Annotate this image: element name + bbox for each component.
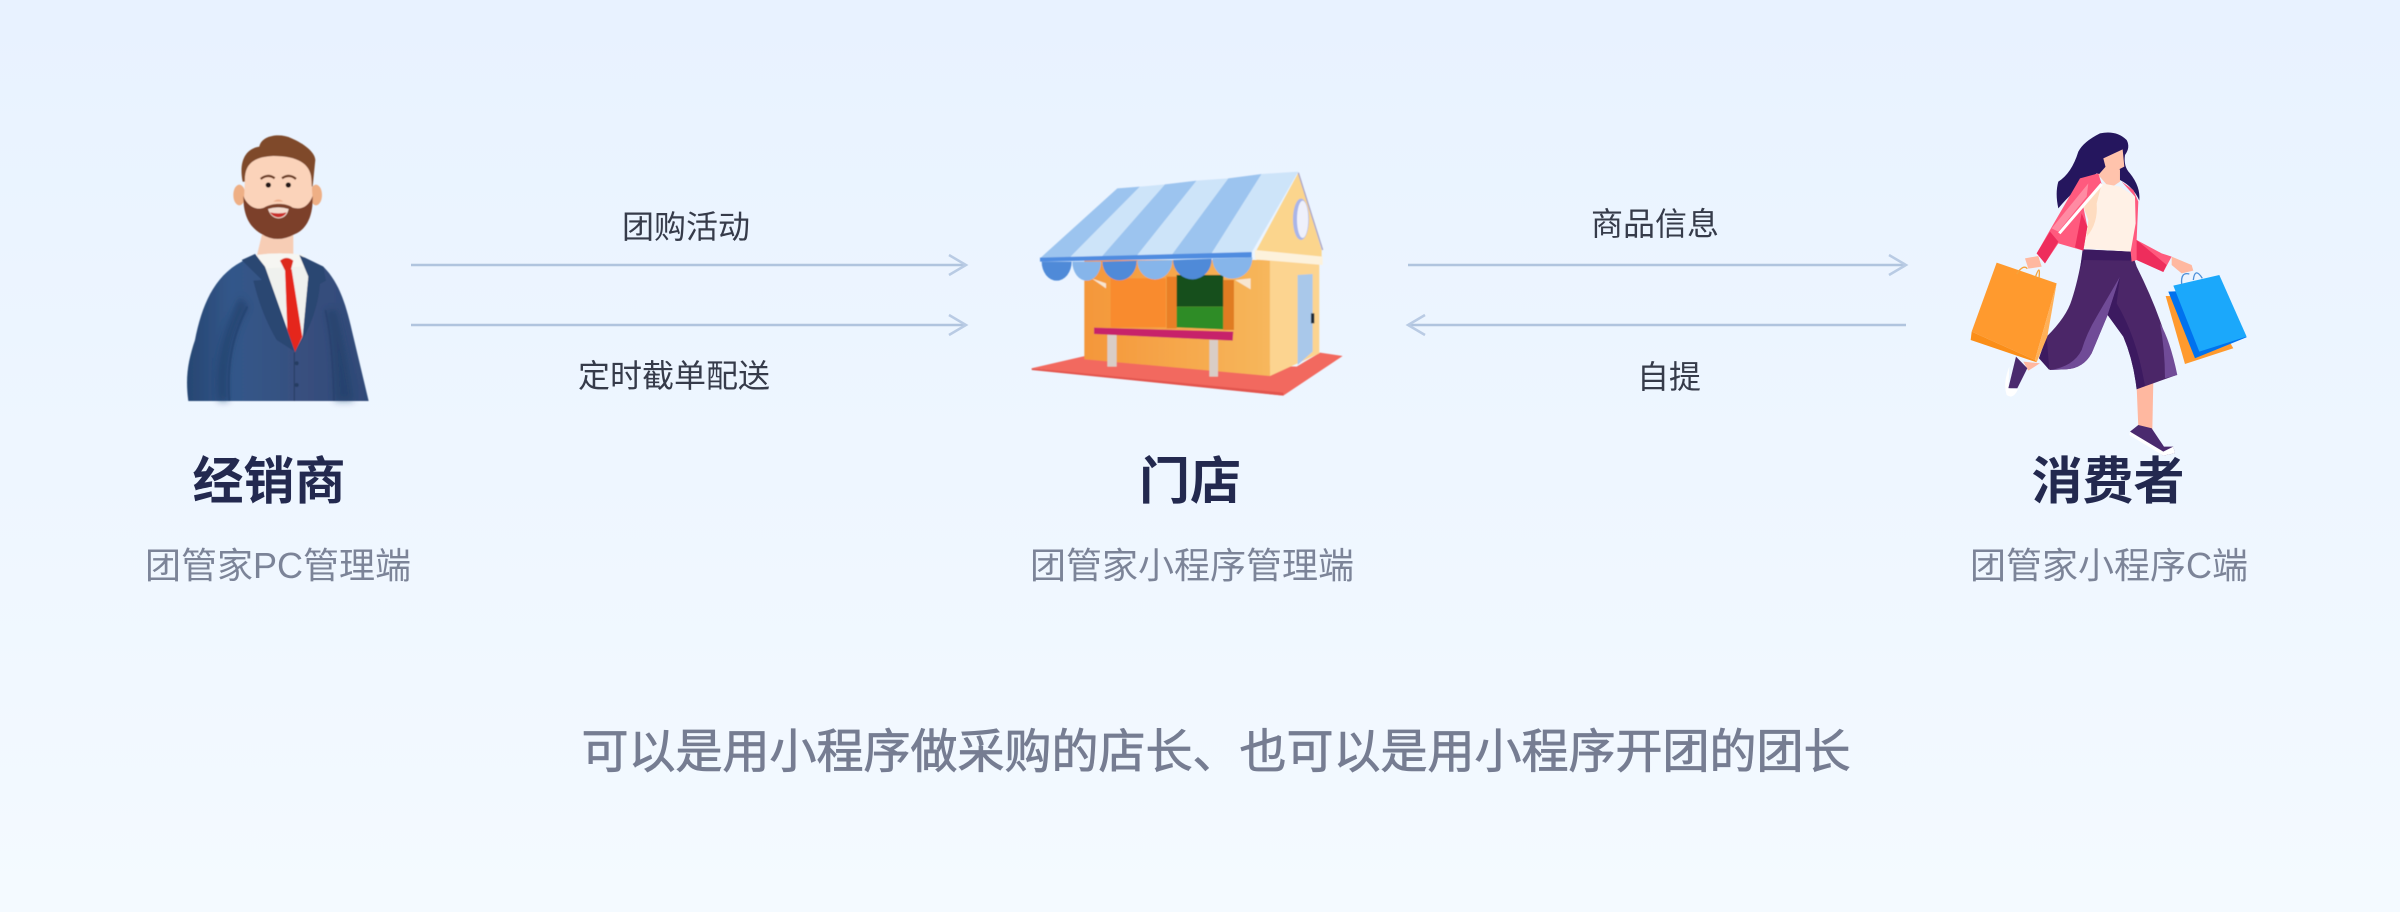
label: 定时截单配送: 定时截单配送 (578, 358, 770, 394)
panel: distributor (145, 135, 411, 586)
icon: storefront (1032, 172, 1343, 396)
label: 团购活动: 团购活动 (622, 209, 750, 245)
heading: 门店: 门店 (1139, 453, 1241, 510)
footer note: 可以是用小程序做采购的店长、也可以是用小程序开团的团长 (582, 725, 1850, 778)
heading: 经销商: 经销商 (192, 453, 346, 510)
icon: shopper woman (1971, 132, 2247, 456)
panel: store (1030, 172, 1354, 586)
subtitle: PC: 团管家PC管理端 (145, 545, 411, 586)
label: 自提: 自提 (1637, 359, 1701, 395)
heading: 消费者: 消费者 (2031, 453, 2185, 510)
arrow: bottom right (411, 315, 966, 335)
arrow: top right (411, 255, 966, 275)
icon: businessman (187, 135, 369, 401)
label: 商品信息: 商品信息 (1591, 206, 1719, 242)
arrow: top right (1408, 255, 1906, 275)
arrows: store and consumer (1408, 206, 1906, 395)
arrow: bottom left (1408, 315, 1906, 335)
arrows: distributor to store (411, 209, 966, 394)
subtitle: mini program C: 团管家小程序C端 (1970, 545, 2248, 586)
subtitle: mini program management: 团管家小程序管理端 (1030, 545, 1354, 586)
panel: consumer (1970, 132, 2248, 586)
